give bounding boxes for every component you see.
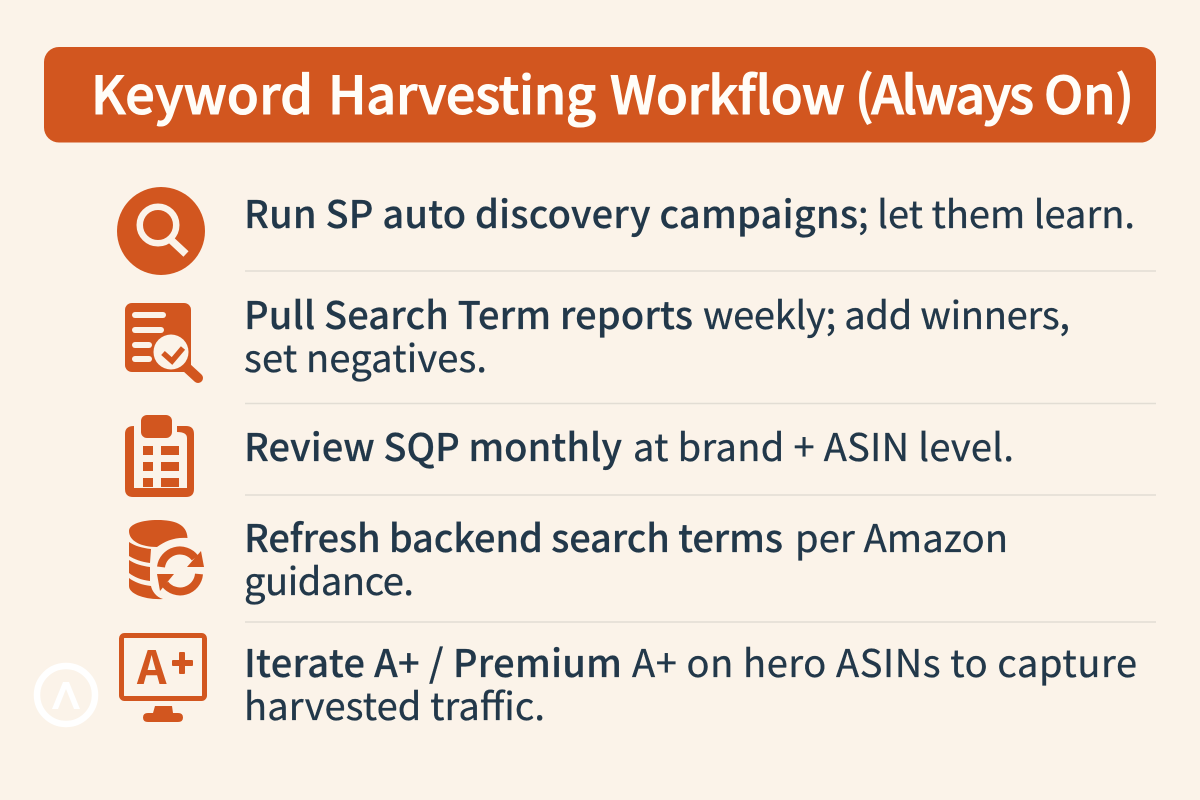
- step 2 text: [244, 285, 1070, 383]
- step 1 text: Run SP auto discovery campaigns: [244, 184, 858, 239]
- step 2 text: set negatives.: [244, 328, 487, 383]
- icon: monitor with A+: A: [136, 632, 167, 698]
- step 2 text: Pull Search Term reports: [244, 285, 693, 340]
- icon: report with magnifier check: [125, 303, 198, 378]
- step 4 text: [244, 508, 1008, 606]
- step 1 text: [244, 184, 1135, 239]
- title: Workflow: [610, 54, 845, 129]
- step 2 text: weekly; add winners,: [703, 285, 1070, 340]
- logo watermark: [37, 666, 95, 724]
- icon: database with refresh arrows: [129, 520, 204, 599]
- icon: clipboard grid: [125, 415, 194, 497]
- title: Keyword: [91, 54, 313, 129]
- step 1 text: ; let them learn.: [858, 184, 1135, 239]
- step 4 text: guidance.: [244, 551, 414, 606]
- icon: magnifying glass in circle: [117, 187, 205, 275]
- title: [91, 54, 1134, 129]
- title: On): [1044, 54, 1134, 129]
- title banner: [44, 47, 1156, 142]
- step 4 text: Refresh backend search terms: [244, 508, 783, 563]
- step 5 text: A+ on hero ASINs to capture: [632, 633, 1137, 688]
- step 3 text: Review SQP monthly: [244, 417, 622, 472]
- step 5 text: harvested traffic.: [244, 676, 545, 731]
- step 4 text: per Amazon: [795, 508, 1008, 563]
- step 3 text: at brand + ASIN level.: [633, 417, 1014, 472]
- step 5 text: [244, 633, 1137, 731]
- step 3 text: [244, 417, 1014, 472]
- icon: monitor with A+: [122, 632, 204, 722]
- title: Harvesting: [328, 54, 596, 129]
- step 5 text: Iterate A+ / Premium: [244, 633, 622, 688]
- title: (Always: [855, 54, 1034, 129]
